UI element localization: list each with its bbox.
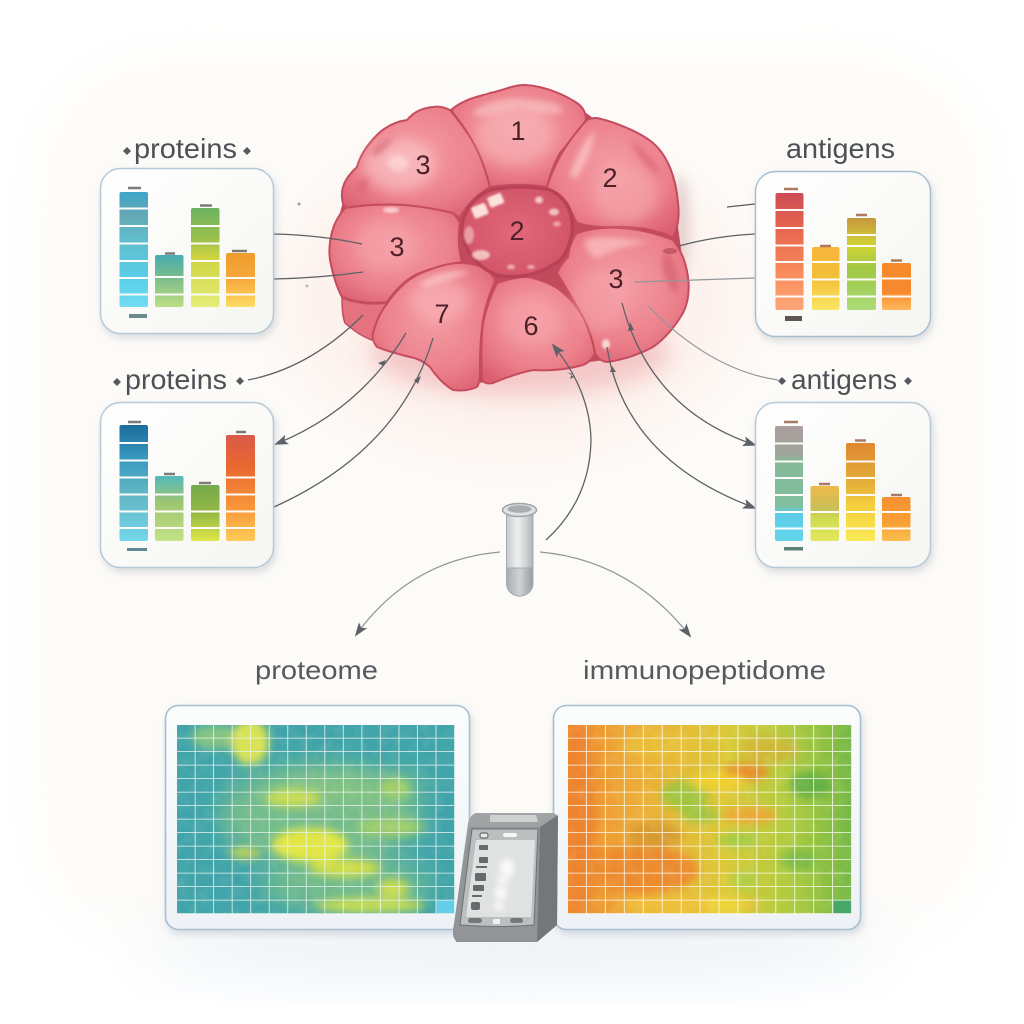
- centre lobe: 2: [462, 187, 572, 277]
- panel: antigens top chart: [756, 172, 930, 336]
- silhouette: [335, 89, 683, 385]
- centre lobe spots: [464, 192, 561, 270]
- connector lines and arrows: [248, 202, 778, 636]
- lobe numbers: 1: [510, 116, 526, 146]
- lobe bottom: 6: [481, 277, 595, 383]
- lobe bottom left: 7: [373, 263, 495, 391]
- lobe numbers: 6: [523, 311, 539, 341]
- lobe upper right: 2: [547, 118, 679, 237]
- small lobe lower left: [342, 298, 387, 340]
- heading: proteins lower: proteins: [125, 364, 227, 395]
- icon: sample test tube: [502, 504, 536, 596]
- panel: proteins top chart: [100, 168, 274, 334]
- lobe numbers: 3: [389, 232, 405, 262]
- lobe numbers: 3: [608, 264, 624, 294]
- heading: immunopeptidome: immunopeptidome: [583, 655, 826, 685]
- heading: proteome: proteome: [255, 655, 378, 685]
- heading: antigens top: antigens: [786, 133, 895, 164]
- lobe lower right: 3: [557, 228, 689, 362]
- lobe top: 1: [451, 85, 586, 187]
- heading: proteins top: proteins: [134, 133, 237, 164]
- small barbs on lines: [378, 322, 634, 384]
- highlights on lobes: [355, 99, 678, 349]
- panel: antigens lower chart: [756, 402, 930, 568]
- lobe numbers: 7: [434, 299, 450, 329]
- lobe upper left: 3: [342, 107, 490, 217]
- panel: proteome heatmap: [166, 706, 470, 930]
- lobe left: 3: [329, 205, 462, 303]
- tumour: segmented organ: [329, 85, 690, 396]
- lobe numbers: 2: [509, 216, 525, 246]
- panel: proteins lower chart: [100, 402, 274, 568]
- lobe numbers: 3: [415, 150, 431, 180]
- lobe numbers: [389, 116, 624, 341]
- lobe numbers: 2: [602, 163, 618, 193]
- panel: immunopeptidome heatmap: [554, 706, 860, 930]
- icon: handheld sequencer device: [453, 813, 558, 942]
- device screen list icons: [471, 845, 488, 910]
- heading: antigens lower: antigens: [791, 364, 897, 395]
